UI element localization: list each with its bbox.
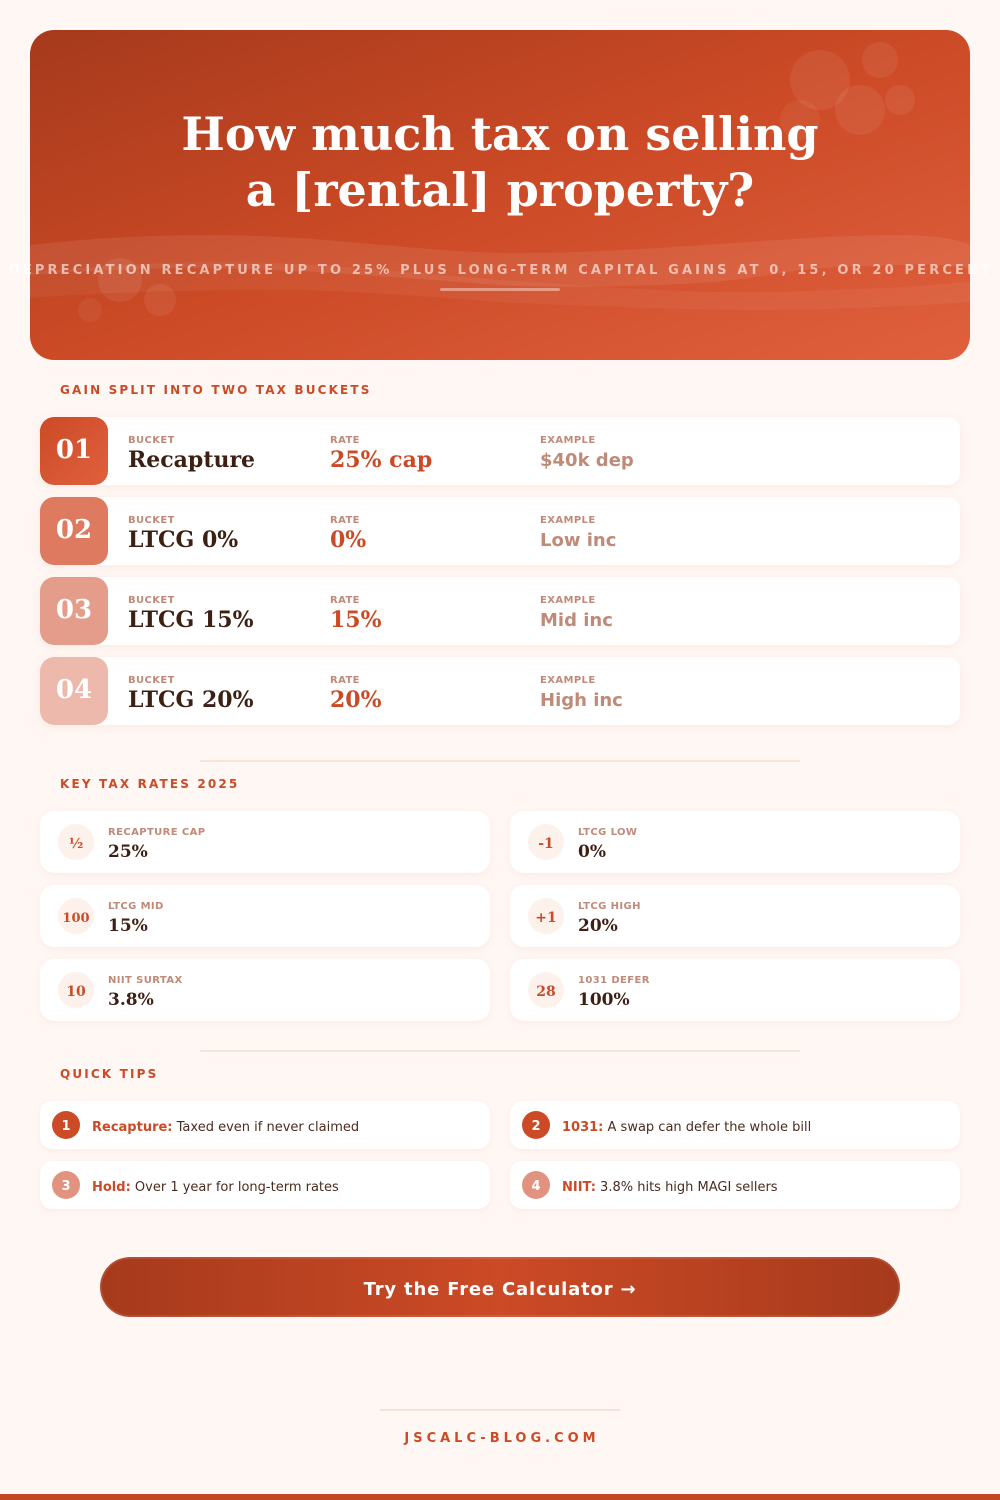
row: bucket 02: RATE — [330, 515, 360, 526]
icon: 100 — [58, 898, 94, 934]
tip number 4 — [522, 1171, 550, 1199]
heading: gain split: GAIN SPLIT INTO TWO TAX BUCKETS — [60, 383, 372, 397]
stat card: LTCG high — [510, 885, 960, 947]
tip 3: Hold: Over 1 year for long-term rates — [92, 1180, 339, 1195]
hero accent bar — [440, 288, 560, 291]
tip number 1: 1 — [61, 1119, 71, 1134]
stat card: recapture cap: RECAPTURE CAP — [108, 827, 206, 838]
number badge 03 — [40, 577, 108, 645]
stat card: NIIT surtax: NIIT SURTAX — [108, 975, 183, 986]
row: bucket 01: Recapture — [128, 447, 255, 473]
stat card: NIIT surtax — [40, 959, 490, 1021]
title — [181, 107, 819, 217]
tip 4: NIIT: 3.8% hits high MAGI sellers — [562, 1180, 778, 1195]
row: bucket 04: High inc — [540, 690, 623, 711]
call to action button: Try the Free Calculator → — [364, 1279, 636, 1300]
stat card: LTCG high: LTCG HIGH — [578, 901, 641, 912]
title: a [rental] property? — [246, 163, 754, 217]
row: bucket 04: BUCKET — [128, 675, 175, 686]
row: bucket 04: RATE — [330, 675, 360, 686]
stat card: LTCG mid: 15% — [108, 916, 148, 936]
row: bucket 02 — [40, 497, 960, 565]
row: bucket 01: 25% cap — [330, 447, 432, 473]
icon: one half — [58, 824, 94, 860]
subtitle: DEPRECIATION RECAPTURE UP TO 25% PLUS LONG-TERM CAPITAL GAINS AT 0, 15, OR 20 PERCENT — [9, 263, 993, 278]
row: bucket 01: $40k dep — [540, 450, 634, 471]
stat card: 1031 defer: 100% — [578, 990, 630, 1010]
icon: 28 — [528, 972, 564, 1008]
stat card: LTCG low: 0% — [578, 842, 606, 862]
stat card: 1031 defer — [510, 959, 960, 1021]
icon: minus one — [528, 824, 564, 860]
row: bucket 02: EXAMPLE — [540, 515, 596, 526]
tip number 1 — [52, 1111, 80, 1139]
row: bucket 01: RATE — [330, 435, 360, 446]
row: bucket 02: LTCG 0% — [128, 527, 238, 553]
row: bucket 03 — [40, 577, 960, 645]
call to action button — [100, 1257, 900, 1317]
number badge 02: 02 — [56, 515, 92, 545]
hero decoration: waves and bubbles — [30, 42, 970, 322]
icon: plus one: +1 — [535, 910, 557, 926]
title: How much tax on selling — [181, 107, 819, 161]
tip number 2 — [522, 1111, 550, 1139]
stat card: LTCG low — [510, 811, 960, 873]
row: bucket 04: 20% — [330, 687, 382, 713]
stat card: LTCG mid — [40, 885, 490, 947]
icon: 28: 28 — [536, 984, 556, 1000]
stat card: LTCG low: LTCG LOW — [578, 827, 637, 838]
row: bucket 03: Mid inc — [540, 610, 613, 631]
tip number 4: 4 — [531, 1179, 541, 1194]
row: bucket 02: BUCKET — [128, 515, 175, 526]
tip number 2: 2 — [531, 1119, 541, 1134]
row: bucket 03: EXAMPLE — [540, 595, 596, 606]
row: bucket 03: LTCG 15% — [128, 607, 254, 633]
stat card: NIIT surtax: 3.8% — [108, 990, 154, 1010]
icon: 100: 100 — [62, 911, 90, 926]
tip 4 — [510, 1161, 960, 1209]
footer site name: JSCALC-BLOG.COM — [404, 1431, 600, 1446]
row: bucket 04: LTCG 20% — [128, 687, 254, 713]
stat card: recapture cap: 25% — [108, 842, 148, 862]
icon: 10 — [58, 972, 94, 1008]
number badge 04 — [40, 657, 108, 725]
tip number 3 — [52, 1171, 80, 1199]
icon: minus one: -1 — [538, 836, 554, 852]
row: bucket 02: Low inc — [540, 530, 616, 551]
number badge 01 — [40, 417, 108, 485]
number badge 04: 04 — [56, 675, 92, 705]
stat card: recapture cap — [40, 811, 490, 873]
hero banner background — [30, 30, 970, 360]
row: bucket 01: BUCKET — [128, 435, 175, 446]
row: bucket 02: 0% — [330, 527, 366, 553]
heading: key tax rates: KEY TAX RATES 2025 — [60, 777, 239, 791]
tip 1: Recapture: Taxed even if never claimed — [92, 1120, 359, 1135]
tip number 3: 3 — [61, 1179, 71, 1194]
tip 3 — [40, 1161, 490, 1209]
stat card: 1031 defer: 1031 DEFER — [578, 975, 650, 986]
number badge 01: 01 — [56, 435, 92, 465]
stat card: LTCG mid: LTCG MID — [108, 901, 164, 912]
icon: 10: 10 — [66, 984, 86, 1000]
row: bucket 03: 15% — [330, 607, 382, 633]
number badge 02 — [40, 497, 108, 565]
number badge 03: 03 — [56, 595, 92, 625]
row: bucket 04 — [40, 657, 960, 725]
row: bucket 03: RATE — [330, 595, 360, 606]
row: bucket 01 — [40, 417, 960, 485]
row: bucket 01: EXAMPLE — [540, 435, 596, 446]
icon: plus one — [528, 898, 564, 934]
icon: one half: ½ — [69, 836, 83, 852]
heading: quick tips: QUICK TIPS — [60, 1067, 158, 1081]
row: bucket 04: EXAMPLE — [540, 675, 596, 686]
tip 1 — [40, 1101, 490, 1149]
row: bucket 03: BUCKET — [128, 595, 175, 606]
stat card: LTCG high: 20% — [578, 916, 618, 936]
tip 2 — [510, 1101, 960, 1149]
tip 2: 1031: A swap can defer the whole bill — [562, 1120, 811, 1135]
